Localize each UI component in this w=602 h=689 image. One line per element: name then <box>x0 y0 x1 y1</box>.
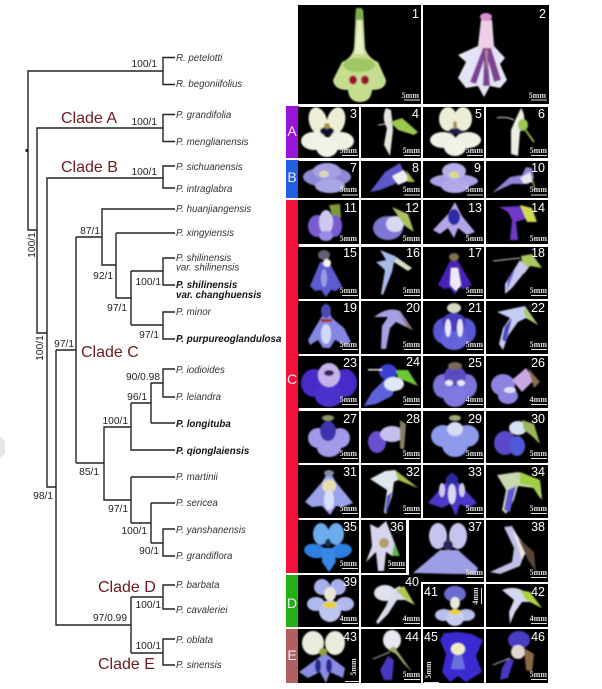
photo panel 30: 5mm <box>530 449 547 458</box>
taxon labels: P. purpureoglandulosa <box>176 334 282 345</box>
photo panel 43 <box>298 629 359 683</box>
taxon labels: P. shilinensis <box>176 280 238 291</box>
photo panel 15: 5mm <box>340 286 357 295</box>
photo panel 24: 5mm <box>403 395 420 404</box>
photo panel 25: 4mm <box>466 395 483 404</box>
taxon labels: P. yanshanensis <box>176 525 246 536</box>
photo panel 31: 5mm <box>340 504 357 513</box>
photo panel 44: 5mm <box>403 670 420 679</box>
photo panel 19: 5mm <box>340 340 357 349</box>
photo panel 42: 42 <box>531 585 545 599</box>
taxon labels: P. sericea <box>176 498 218 509</box>
photo panel 6: 5mm <box>530 146 547 155</box>
taxon labels <box>176 53 282 671</box>
photo panel 20 <box>361 301 421 354</box>
photo panel 35: 5mm <box>340 559 357 568</box>
photo panel 4 <box>361 107 421 158</box>
support values: 97/0.99 <box>93 613 127 624</box>
taxon labels: P. barbata <box>176 580 220 591</box>
photo panel 9 <box>423 161 484 198</box>
photo panel 9: 9 <box>474 161 481 175</box>
photo panel 33: 5mm <box>466 504 483 513</box>
support values: 97/1 <box>54 339 74 350</box>
colour bar: clade C: C <box>287 371 297 387</box>
colour bar: clade D <box>286 575 299 627</box>
taxon labels: P. xingyiensis <box>176 228 234 239</box>
photo panel 37 <box>409 520 484 582</box>
taxon labels: P. intraglabra <box>176 184 233 195</box>
photo panel 33 <box>423 465 484 518</box>
photo panel 30: 30 <box>531 412 545 426</box>
photo panel 3: 5mm <box>340 146 357 155</box>
photo panel 22 <box>486 301 548 354</box>
photo panel 12: 5mm <box>403 234 420 243</box>
photo panel 11 <box>298 200 359 244</box>
support values: 100/1 <box>27 232 38 258</box>
taxon labels: P. qionglaiensis <box>176 446 250 457</box>
colour bar: clade E: E <box>287 647 297 663</box>
colour bar: clade C <box>286 200 299 573</box>
taxon labels: R. petelotti <box>176 53 223 64</box>
photo panel 7: 5mm <box>340 185 357 194</box>
photo panel 27: 5mm <box>340 449 357 458</box>
photo panel 10 <box>486 161 548 198</box>
photo panel 37: 5mm <box>466 568 483 577</box>
photo panel 34 <box>486 465 548 518</box>
photo panel 11: 11 <box>344 201 357 215</box>
photo panel 45 <box>423 629 484 683</box>
photo panel 10: 5mm <box>530 185 547 194</box>
support values: 100/1 <box>132 59 157 70</box>
photo panel 42: 4mm <box>530 614 547 623</box>
photo panel 17 <box>423 246 484 299</box>
support values: 96/1 <box>127 392 147 403</box>
photo panel 41 <box>423 584 484 627</box>
photo panel 26: 26 <box>531 356 545 370</box>
photo panel 23: 5mm <box>340 395 357 404</box>
photo panel 29: 29 <box>468 412 482 426</box>
photo panel 16: 16 <box>406 246 420 260</box>
photo panel 36: 5mm <box>388 559 405 568</box>
photo panel 28: 28 <box>406 412 420 426</box>
photo panel 25 <box>423 356 484 408</box>
taxon labels: var. changhuensis <box>176 290 262 301</box>
photo panel 41: 41 <box>424 585 438 599</box>
photo panel 14: 5mm <box>530 234 547 243</box>
photo panel 31 <box>298 465 359 518</box>
photo panel 10: 10 <box>531 161 545 175</box>
photo panel 29 <box>423 411 484 463</box>
taxon labels: P. iodioides <box>176 365 225 376</box>
photo panel 16: 5mm <box>403 286 420 295</box>
support values: 85/1 <box>79 467 99 478</box>
photo panel 38: 38 <box>531 520 545 534</box>
support values: 90/0.98 <box>126 372 160 383</box>
photo panel 28: 5mm <box>403 449 420 458</box>
photo panel 21: 5mm <box>466 340 483 349</box>
photo panel 45: 45 <box>424 630 438 644</box>
clade labels: Clade B <box>61 159 118 176</box>
photo panel 25: 25 <box>468 356 482 370</box>
taxon labels: P. shilinensis <box>176 253 231 264</box>
photo panel 24 <box>361 355 421 408</box>
photo panel 26: 4mm <box>530 395 547 404</box>
photo panel 19: 19 <box>343 301 357 315</box>
photo panel 7: 7 <box>350 161 357 175</box>
photo panel 43: 43 <box>343 630 357 644</box>
clade labels: Clade A <box>61 110 117 127</box>
photo panel 15 <box>298 246 359 299</box>
photo panel 12 <box>361 200 421 244</box>
photo panel 45: 5mm <box>424 661 433 679</box>
support values: 100/1 <box>136 600 161 611</box>
photo panel 22: 5mm <box>530 340 547 349</box>
photo panel 30 <box>486 411 548 463</box>
root tick <box>26 149 28 152</box>
photo panel 32 <box>361 465 421 518</box>
support values: 100/1 <box>136 277 161 288</box>
photo panel 16 <box>361 246 421 299</box>
photo panel 42 <box>486 584 548 627</box>
photo panel 37: 37 <box>468 520 482 534</box>
photo panel 41: 4mm <box>471 587 480 605</box>
photo panel 40: 4mm <box>403 614 420 623</box>
photo panel 17: 5mm <box>466 286 483 295</box>
colour bar: clade B <box>286 160 299 198</box>
photo panel 1: 1 <box>412 7 419 21</box>
photo panel 8 <box>361 161 421 198</box>
photo panel 20: 5mm <box>403 340 420 349</box>
photo panel 18 <box>486 246 548 299</box>
photo panel 8: 5mm <box>403 185 420 194</box>
photo panel 33: 33 <box>468 465 482 479</box>
taxon labels: P. sinensis <box>176 660 222 671</box>
taxon labels: P. huanjiangensis <box>176 204 251 215</box>
taxon labels: var. shilinensis <box>176 262 239 274</box>
photo panel 44 <box>361 629 421 683</box>
photo panel 23: 23 <box>343 356 357 370</box>
photo panel 27: 27 <box>343 412 357 426</box>
photo panel 19 <box>298 301 359 354</box>
photo panel 18: 5mm <box>530 286 547 295</box>
photo panel 35: 35 <box>343 520 357 534</box>
colour bar: clade B: B <box>287 169 297 185</box>
photo panel 5: 5 <box>475 107 482 121</box>
photo panel 21: 21 <box>468 301 482 315</box>
support values: 100/1 <box>35 335 46 361</box>
photo panel 24: 24 <box>406 355 420 369</box>
support values: 87/1 <box>80 226 100 237</box>
taxon labels: P. oblata <box>176 635 214 646</box>
photo panel 13: 13 <box>468 201 482 215</box>
colour bar: clade E <box>286 629 299 683</box>
support values: 100/1 <box>132 117 157 128</box>
photo panel 12: 12 <box>405 201 419 215</box>
support values: 90/1 <box>139 546 159 557</box>
photo panel 39 <box>298 575 359 627</box>
photo panel 39: 4mm <box>340 614 357 623</box>
photo panel 31: 31 <box>343 465 357 479</box>
photo panel 22: 22 <box>531 301 545 315</box>
photo panel 15: 15 <box>343 246 357 260</box>
support values: 100/1 <box>136 641 161 652</box>
support values: 100/1 <box>122 526 147 537</box>
photo panel 6: 6 <box>538 107 545 121</box>
grey edge mark <box>0 437 5 458</box>
photo panel 1 <box>298 5 421 104</box>
taxon labels: P. leiandra <box>176 392 222 403</box>
taxon labels: P. grandifolia <box>176 110 232 121</box>
photo panel 6 <box>486 107 548 158</box>
photo panel 38 <box>486 520 548 582</box>
taxon labels: P. minor <box>176 307 212 318</box>
photo panel 2: 5mm <box>529 91 546 100</box>
phylogenetic tree branches <box>28 58 175 665</box>
photo panel 7 <box>298 161 359 198</box>
photo panel 9: 5mm <box>466 185 483 194</box>
photo panel 8: 8 <box>412 161 419 175</box>
photo panel 4: 4 <box>412 107 419 121</box>
photo panel 13 <box>423 200 484 244</box>
photo panel 3: 3 <box>350 107 357 121</box>
taxon labels: P. sichuanensis <box>176 162 243 173</box>
support values: 92/1 <box>93 271 113 282</box>
taxon labels: P. martinii <box>176 472 219 483</box>
photo panel 4: 5mm <box>403 146 420 155</box>
taxon labels: P. cavaleriei <box>176 605 228 616</box>
photo panel 2: 2 <box>539 7 546 21</box>
support values: 97/1 <box>139 330 159 341</box>
photo panel 14: 14 <box>531 201 545 215</box>
photo panel 28 <box>361 411 421 463</box>
colour bar: clade D: D <box>287 595 297 611</box>
taxon labels: P. longituba <box>176 419 231 430</box>
photo panel 13: 5mm <box>466 234 483 243</box>
photo panel 23 <box>298 356 359 408</box>
taxon labels: P. grandiflora <box>176 551 233 562</box>
support values: 100/1 <box>132 167 157 178</box>
colour bar: clade A <box>286 106 299 158</box>
photo panel 32: 32 <box>406 465 420 479</box>
photo panel 40 <box>361 575 421 627</box>
photo panel 44: 44 <box>405 630 419 644</box>
taxon labels: R. begoniifolius <box>176 79 242 90</box>
photo panel 46: 5mm <box>530 670 547 679</box>
photo panel 34: 5mm <box>530 504 547 513</box>
photo panel 35 <box>298 520 359 573</box>
photo panel 27 <box>298 411 359 463</box>
photo panel 40: 40 <box>405 575 419 589</box>
photo panel 2 <box>423 5 549 104</box>
photo panel 21 <box>423 301 484 354</box>
photo panel 26 <box>486 356 548 408</box>
photo panel 46 <box>486 629 548 683</box>
support values: 97/1 <box>107 303 127 314</box>
photo panel 32: 5mm <box>403 504 420 513</box>
photo panel 34: 34 <box>531 465 545 479</box>
photo panel 36: 36 <box>390 520 404 534</box>
photo panel 20: 20 <box>406 301 420 315</box>
photo panel 36 <box>361 520 406 573</box>
colour bar: clade A: A <box>287 123 297 139</box>
support values: 100/1 <box>102 416 128 427</box>
photo panel 29: 5mm <box>466 449 483 458</box>
photo panel 14 <box>486 200 548 244</box>
photo panel 43: 5mm <box>349 658 358 676</box>
clade labels: Clade C <box>81 344 139 361</box>
photo panel 5: 5mm <box>466 146 483 155</box>
photo panel 17: 17 <box>468 246 482 260</box>
support values <box>27 59 161 652</box>
clade labels: Clade E <box>98 656 155 673</box>
photo panel 38: 5mm <box>530 568 547 577</box>
clade labels <box>61 110 156 673</box>
taxon labels: P. menglianensis <box>176 137 249 148</box>
photo panel 46: 46 <box>531 630 545 644</box>
support values: 98/1 <box>33 491 53 502</box>
photo panel 11: 5mm <box>340 234 357 243</box>
photo panel 18: 18 <box>531 246 545 260</box>
photo panel 39: 39 <box>343 575 357 589</box>
photo panel 5 <box>423 107 484 158</box>
photo panel 3 <box>298 105 359 158</box>
photo panel 1: 5mm <box>402 91 419 100</box>
support values: 97/1 <box>108 504 128 515</box>
clade labels: Clade D <box>98 579 156 596</box>
